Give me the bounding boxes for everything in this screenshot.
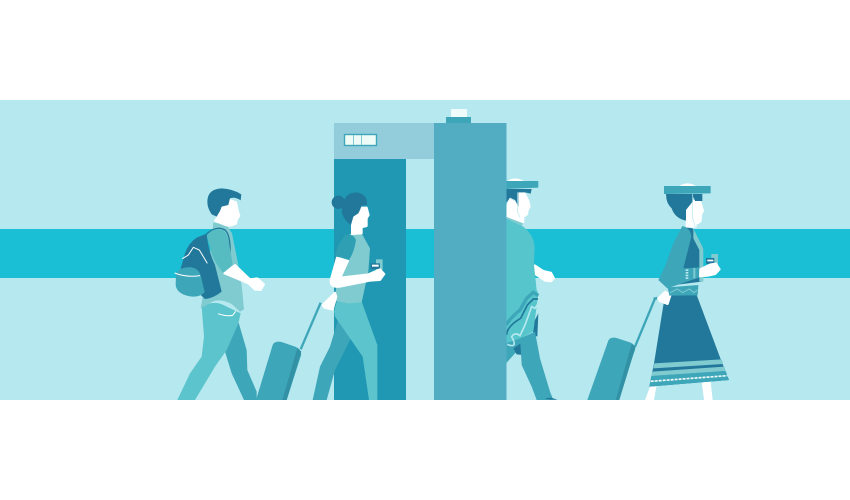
hair	[207, 188, 241, 217]
face and neck	[687, 201, 703, 227]
suitcase of woman	[256, 303, 321, 400]
hand	[700, 264, 720, 276]
person: woman in traditional dress, skirt	[645, 295, 729, 400]
left hand	[658, 292, 671, 304]
suitcase of traditional woman	[587, 297, 657, 400]
coat back panel	[532, 313, 538, 337]
gate: right post	[434, 123, 506, 400]
gate: display panel	[344, 134, 376, 146]
horizontal stripe	[0, 229, 850, 278]
gate: top sensor	[446, 109, 471, 123]
face and neck	[506, 193, 530, 222]
strap	[206, 228, 230, 253]
backpack pocket	[176, 267, 205, 297]
coat lower tip	[506, 335, 523, 363]
phone	[711, 254, 718, 265]
face	[215, 200, 239, 226]
leg	[520, 332, 553, 400]
person: man with backpack	[175, 188, 264, 400]
hand	[535, 265, 554, 281]
person: man in traditional dress	[506, 178, 557, 400]
collar	[506, 217, 524, 226]
waist band	[668, 285, 698, 296]
hair	[506, 189, 532, 207]
lapel	[693, 228, 703, 282]
back leg	[225, 322, 257, 400]
gate: left post and header	[334, 123, 435, 400]
bodice	[678, 227, 704, 285]
hat	[507, 178, 524, 181]
coat trim	[506, 292, 538, 325]
hair	[666, 194, 702, 221]
person: woman in traditional dress, upper body	[658, 183, 720, 304]
sleeve	[658, 226, 699, 288]
arm	[224, 265, 264, 290]
front leg	[177, 303, 241, 400]
background panel	[0, 100, 850, 400]
shirt	[201, 222, 244, 312]
coat	[506, 218, 538, 343]
sleeve	[207, 229, 233, 273]
person: woman with suitcase	[313, 192, 384, 400]
hat	[679, 183, 696, 186]
white details	[175, 247, 236, 316]
backpack	[181, 234, 222, 299]
